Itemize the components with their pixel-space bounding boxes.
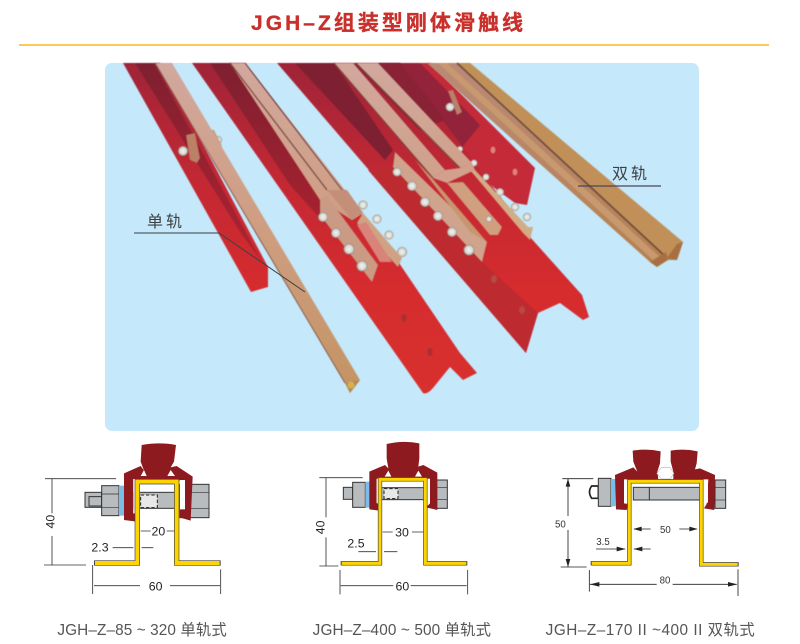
rail: left red channel xyxy=(123,63,268,292)
bolt assembly xyxy=(589,478,726,508)
diagram: JGH-Z-85~320 single rail: 40 xyxy=(44,515,58,529)
callout: single rail: 单轨 xyxy=(147,213,182,231)
hidden slot xyxy=(141,495,157,508)
panel: product photo xyxy=(105,63,699,431)
diagram: JGH-Z-400~500 single rail: 60 xyxy=(395,579,409,593)
caption: JGH–Z–170 II ~400 II 双轨式 xyxy=(546,622,755,639)
hidden slot xyxy=(384,489,398,499)
caption: JGH–Z–85 ~ 320 单轨式 xyxy=(57,622,227,639)
yellow profile xyxy=(341,479,467,563)
bolt assembly xyxy=(343,480,447,508)
title underline xyxy=(19,44,769,46)
rail: right red channel xyxy=(277,63,589,353)
dimensions xyxy=(319,478,468,594)
red clamp xyxy=(124,443,193,522)
centre white insulator xyxy=(657,467,674,479)
diagram: JGH-Z-85~320 single rail: 60 xyxy=(149,579,163,593)
rail: far red channel xyxy=(378,63,535,205)
copper bars and clamp: right rail xyxy=(334,63,533,262)
red clamp right xyxy=(671,450,715,510)
yellow profile xyxy=(591,481,739,564)
yellow profile xyxy=(94,482,221,563)
copper bar: double rail xyxy=(427,63,683,267)
dimensions xyxy=(561,479,738,596)
clip and bolt: far rail xyxy=(446,90,462,115)
diagram: JGH-Z-170II~400II double rail: 50 xyxy=(555,520,566,531)
dimensions xyxy=(44,479,221,594)
rail: centre-left red channel xyxy=(192,63,477,393)
diagram: JGH-Z-170II~400II double rail: 50 xyxy=(660,525,671,536)
callout: single rail xyxy=(134,213,305,292)
copper bar: centre-left rail xyxy=(230,63,363,220)
copper bar: left rail xyxy=(155,63,360,393)
caption: JGH–Z–400 ~ 500 单轨式 xyxy=(313,622,491,639)
bolt assembly xyxy=(85,484,209,518)
red clamp left xyxy=(615,450,661,510)
red clamp xyxy=(369,442,437,511)
callout: double rail xyxy=(578,165,661,186)
diagram: JGH-Z-400~500 single rail: 2.5 xyxy=(347,536,365,550)
clamp and bolts: left rail xyxy=(178,130,222,163)
diagram: JGH-Z-170II~400II double rail xyxy=(546,450,755,639)
diagram: JGH-Z-400~500 single rail xyxy=(313,442,491,639)
title: JGH–Z组装型刚体滑触线 xyxy=(251,12,523,35)
diagram: JGH-Z-85~320 single rail: 20 xyxy=(151,524,165,538)
diagram: JGH-Z-170II~400II double rail: 3.5 xyxy=(596,537,610,548)
diagram: JGH-Z-170II~400II double rail: 80 xyxy=(660,575,670,586)
diagram: JGH-Z-85~320 single rail: 2.3 xyxy=(91,541,109,555)
diagram: JGH-Z-85~320 single rail xyxy=(44,443,227,639)
callout: double rail: 双轨 xyxy=(612,165,647,183)
diagram: JGH-Z-400~500 single rail: 30 xyxy=(395,525,409,539)
diagram: JGH-Z-400~500 single rail: 40 xyxy=(314,520,328,534)
clamp and bolts: centre-left rail xyxy=(318,190,407,282)
